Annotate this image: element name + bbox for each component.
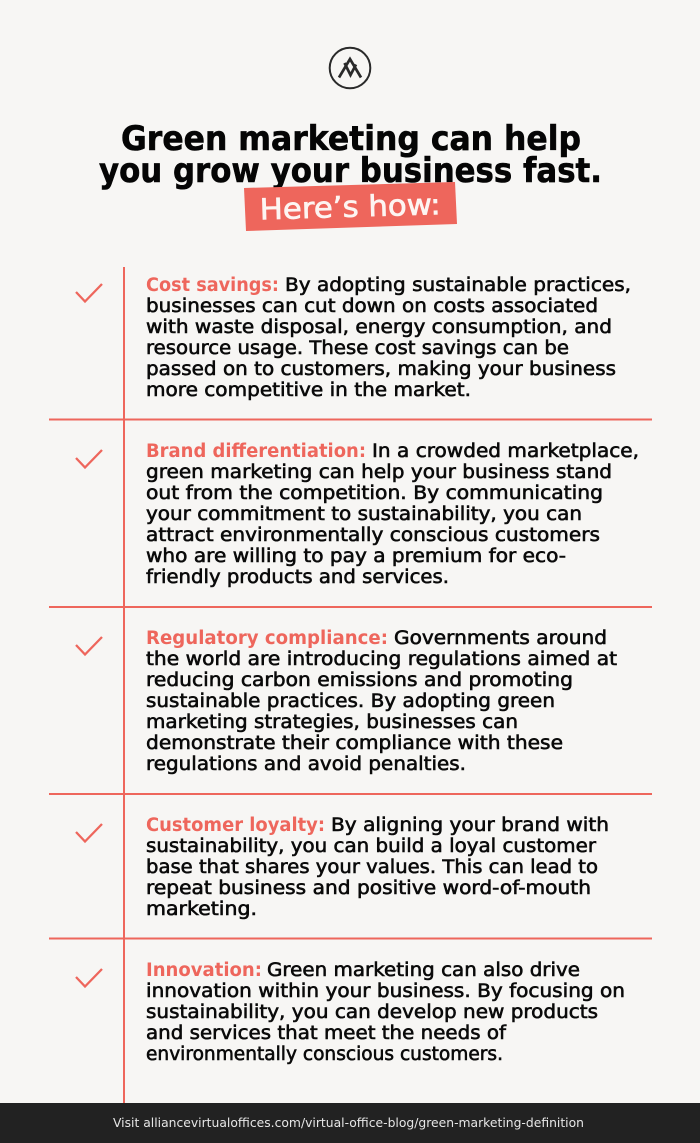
divider 1	[49, 418, 652, 420]
subtitle banner: Here's how	[244, 182, 457, 231]
text: regulatory compliance	[146, 628, 617, 775]
text: regulatory compliance: reducing carbon emissions and promoting	[146, 670, 573, 691]
subtitle banner: Here's how: Here’s how:	[259, 187, 441, 226]
footer bar: Visit alliancevirtualoffices.com/virtual-office-blog/green-marketing-definition	[113, 1115, 584, 1130]
text: cost savings: resource usage. These cost savings can be	[146, 338, 569, 359]
icon: check	[76, 637, 102, 654]
text: regulatory compliance: Governments around	[394, 628, 607, 649]
text: regulatory compliance: regulations and avoid penalties.	[146, 754, 466, 775]
text: brand differentiation: attract environmentally conscious customers	[146, 525, 600, 546]
text: innovation: innovation within your business. By focusing on	[146, 981, 625, 1002]
title: you grow your business fast.	[99, 151, 602, 191]
text: brand differentiation: green marketing can help your business stand	[146, 462, 612, 483]
text: customer loyalty: marketing.	[146, 899, 257, 920]
text: innovation: environmentally conscious customers.	[146, 1044, 503, 1065]
icon: check	[76, 969, 102, 986]
text: regulatory compliance: the world are introducing regulations aimed at	[146, 649, 617, 670]
footer bar	[0, 1103, 700, 1143]
text: innovation: Innovation:	[146, 960, 262, 981]
text: brand differentiation: Brand differentiation:	[146, 441, 366, 462]
text: brand differentiation	[146, 441, 639, 588]
text: brand differentiation: your commitment to sustainability, you can	[146, 504, 582, 525]
panel: innovation	[76, 960, 625, 1065]
icon: check	[76, 824, 102, 842]
text: cost savings: passed on to customers, making your business	[146, 359, 616, 380]
icon: check	[76, 450, 102, 468]
vertical timeline rule	[123, 267, 125, 1103]
text: regulatory compliance: demonstrate their compliance with these	[146, 733, 563, 754]
title	[99, 119, 602, 191]
text: customer loyalty	[146, 815, 609, 920]
divider 3	[49, 793, 652, 795]
text: cost savings: By adopting sustainable practices,	[285, 275, 631, 296]
text: customer loyalty: By aligning your brand with	[331, 815, 609, 836]
text: regulatory compliance: sustainable practices. By adopting green	[146, 691, 555, 712]
title: Green marketing can help	[121, 119, 581, 159]
text: cost savings: with waste disposal, energy consumption, and	[146, 317, 612, 338]
text: brand differentiation: In a crowded marketplace,	[372, 441, 639, 462]
text: innovation: and services that meet the needs of	[146, 1023, 507, 1044]
text: cost savings: more competitive in the market.	[146, 380, 471, 401]
text: customer loyalty: sustainability, you can build a loyal customer	[146, 836, 596, 857]
text: cost savings: Cost savings:	[146, 275, 279, 296]
text: customer loyalty: repeat business and positive word-of-mouth	[146, 878, 591, 899]
text: innovation: Green marketing can also drive	[267, 960, 580, 981]
text: customer loyalty: base that shares your values. This can lead to	[146, 857, 598, 878]
text: cost savings	[146, 275, 631, 401]
icon: check	[76, 284, 102, 302]
text: regulatory compliance: marketing strategies, businesses can	[146, 712, 518, 733]
text: brand differentiation: out from the competition. By communicating	[146, 483, 603, 504]
text: innovation	[146, 960, 625, 1065]
panel: customer loyalty	[76, 815, 609, 920]
panel: regulatory compliance	[76, 628, 617, 775]
text: brand differentiation: friendly products and services.	[146, 567, 449, 588]
text: innovation: sustainability, you can develop new products	[146, 1002, 598, 1023]
panel: cost savings	[76, 275, 631, 401]
divider 4	[49, 938, 652, 940]
icon: logo	[330, 48, 370, 88]
divider 2	[49, 606, 652, 608]
panel: brand differentiation	[76, 441, 639, 588]
text: customer loyalty: Customer loyalty:	[146, 815, 325, 836]
text: regulatory compliance: Regulatory compliance:	[146, 628, 388, 649]
text: cost savings: businesses can cut down on costs associated	[146, 296, 598, 317]
text: brand differentiation: who are willing to pay a premium for eco-	[146, 546, 566, 567]
